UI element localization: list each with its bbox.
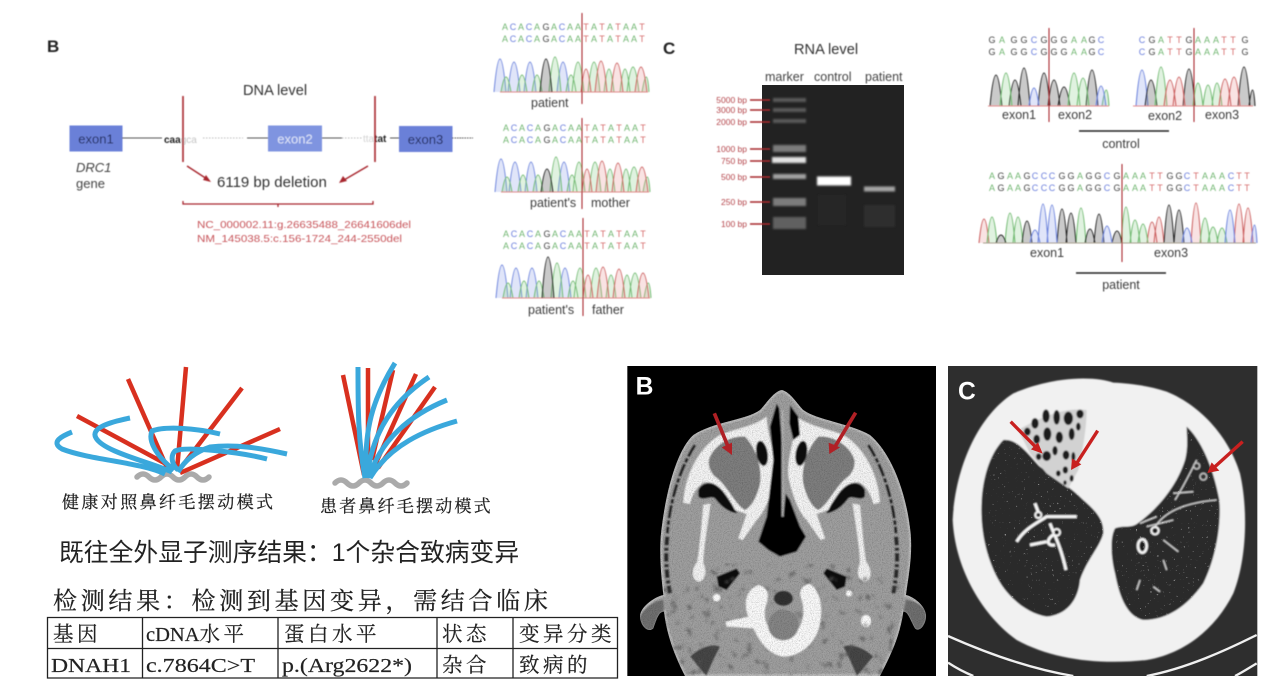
chromatogram: control exon2-exon3: exon2 [1148, 109, 1182, 123]
heading: prior whole-exome result: 既往全外显子测序结果：1个杂合致病变异 [59, 539, 519, 567]
panel: family Sanger chromatograms [494, 13, 651, 317]
chromatogram: father: ACACA GACAATATATAAT [503, 241, 646, 251]
panel letter C: C [663, 39, 675, 58]
gel size marker labels: 3000 bp [716, 105, 747, 115]
table: variant result: p.(Arg2622*) [282, 655, 412, 677]
table: variant result: DNAH1 [51, 655, 131, 677]
chromatogram: patient exon1-exon3 [979, 164, 1257, 262]
chromatogram: control exon2-exon3: C G A TT G AAATT G [1139, 47, 1249, 57]
patient label with bar [1076, 273, 1166, 292]
diagram: patient nasal cilia beat pattern [335, 363, 457, 486]
table: variant result: 蛋白水平 [284, 623, 380, 646]
table: variant result: c.7864C>T [146, 655, 256, 677]
gel size marker labels [716, 95, 770, 229]
red cilia strokes [343, 368, 435, 475]
chromatogram: control exon2-exon3 [1133, 28, 1255, 123]
table: variant result: 基因 [53, 623, 101, 646]
chromatogram: patient exon1-exon3: A G AA GCCC GG A GGC G AAA TT GGC T AAA CTT [989, 171, 1250, 181]
gene label: DRC1 [76, 160, 111, 175]
breakpoint sequence left: caagca [164, 135, 197, 146]
chromatogram: patient: patient [531, 96, 569, 110]
gel lane labels: marker [765, 70, 804, 84]
gel size marker labels: 5000 bp [716, 95, 747, 105]
scanner table arcs [948, 635, 1257, 676]
chromatogram: control exon2-exon3: exon3 [1205, 108, 1239, 122]
table: variant result: 状态 [442, 623, 490, 646]
gene label: gene [76, 176, 105, 191]
epithelium wave [335, 480, 407, 486]
chromatogram: control exon2-exon3: C G A TT G AAATT G [1139, 35, 1249, 45]
chromatogram: control exon1-exon2: G A GG C GGG AAGC [988, 47, 1105, 57]
brace under deletion [183, 201, 373, 207]
chromatogram: mother: mother [591, 196, 630, 210]
exon3 box: exon3 [408, 132, 443, 147]
red variant nomenclature: NC_000002.11:g.26635488_26641606del [197, 219, 411, 231]
blue cilia strokes [57, 418, 287, 474]
heading: DNA level: DNA level [243, 83, 307, 99]
panel: DNA level gene diagram [47, 37, 473, 245]
gel size marker labels: 500 bp [721, 172, 747, 182]
table: variant result [48, 618, 618, 678]
gel size marker labels: 250 bp [721, 197, 747, 207]
panel: RNA gel electrophoresis [663, 39, 904, 275]
table: variant result: 变异分类 [519, 623, 615, 646]
table: variant result: 杂合 [442, 654, 490, 677]
chromatogram: control exon1-exon2: exon1 [1002, 108, 1036, 122]
chromatogram: father: ACACA GACAATATATAAT [503, 229, 646, 239]
breakpoint sequence right: ttatat [363, 134, 387, 145]
chromatogram: control exon1-exon2 [988, 28, 1109, 122]
exon2 box [268, 126, 322, 152]
chromatogram: father: father [592, 303, 624, 317]
CT image B: sinus scan [620, 360, 943, 680]
chromatogram: patient: ACACA GACAATATATAAT [502, 34, 645, 44]
chromatogram: father: patient's [528, 303, 574, 317]
gel lane labels [765, 70, 903, 84]
arrow: right breakpoint to deletion [339, 166, 368, 183]
chromatogram: mother: ACACA GACAATATATAAT [503, 135, 646, 145]
gel image [762, 85, 904, 275]
gel size marker labels: 2000 bp [716, 117, 747, 127]
red variant nomenclature [197, 219, 411, 245]
control label with bar: control [1102, 137, 1140, 151]
heading: test result: 检测结果：检测到基因变异，需结合临床 [53, 588, 552, 615]
epithelium wave [137, 474, 209, 480]
exon1 box [70, 126, 122, 152]
image letter C: C [958, 378, 976, 405]
arrows pointing to bronchiectasis [1011, 422, 1243, 473]
gel size marker labels: 750 bp [721, 156, 747, 166]
gene label [76, 160, 111, 191]
table: variant result: 致病的 [519, 654, 591, 677]
gel size marker labels: 100 bp [721, 219, 747, 229]
arrows pointing to maxillary sinuses [714, 413, 856, 455]
chromatogram: mother: ACACA GACAATATATAAT [503, 123, 646, 133]
exon2 box: exon2 [277, 132, 313, 146]
caption: healthy control: 健康对照鼻纤毛摆动模式 [62, 493, 275, 512]
chromatogram: patient exon1-exon3: A G AA GCCC GG A GGC G AAA TT GGC T AAA CTT [989, 183, 1250, 193]
arrow: left breakpoint to deletion [187, 166, 211, 182]
panel letter B: B [47, 37, 59, 56]
red breakpoint lines [183, 96, 375, 162]
CT image C: chest scan [948, 366, 1257, 676]
chromatogram: patient [494, 13, 649, 110]
caption: patient: 患者鼻纤毛摆动模式 [320, 497, 493, 516]
deletion label: 6119 bp deletion [217, 174, 327, 191]
chromatogram: mother: patient's [530, 196, 576, 210]
gel size marker labels: 1000 bp [716, 144, 747, 154]
chromatogram: control exon1-exon2: exon2 [1058, 108, 1092, 122]
chromatogram: patient: ACACA GACAATATATAAT [502, 22, 645, 32]
chromatogram: control exon1-exon2: G A GG C GGG AAGC [988, 35, 1105, 45]
exon1 box: exon1 [78, 132, 114, 146]
red cilia strokes [77, 367, 280, 473]
table: variant result: cDNA水平 [146, 623, 248, 646]
chromatogram: patient exon1-exon3: exon1 [1030, 246, 1064, 260]
patient label with bar: patient [1102, 278, 1140, 292]
panel: cDNA sequencing chromatograms [979, 28, 1257, 292]
gel lane labels: patient [865, 70, 903, 84]
control label with bar [1079, 131, 1169, 151]
chromatogram: patient exon1-exon3: exon3 [1154, 246, 1188, 260]
chromatogram: mother [495, 118, 650, 210]
diagram: healthy control nasal cilia beat pattern [57, 367, 287, 480]
heading: RNA level: RNA level [794, 42, 858, 58]
chromatogram: father [496, 218, 651, 317]
red variant nomenclature: NM_145038.5:c.156-1724_244-2550del [197, 233, 402, 245]
exon3 box [399, 126, 452, 152]
gel lane labels: control [814, 70, 852, 84]
image letter B: B [636, 374, 653, 401]
blue cilia strokes [358, 363, 457, 478]
